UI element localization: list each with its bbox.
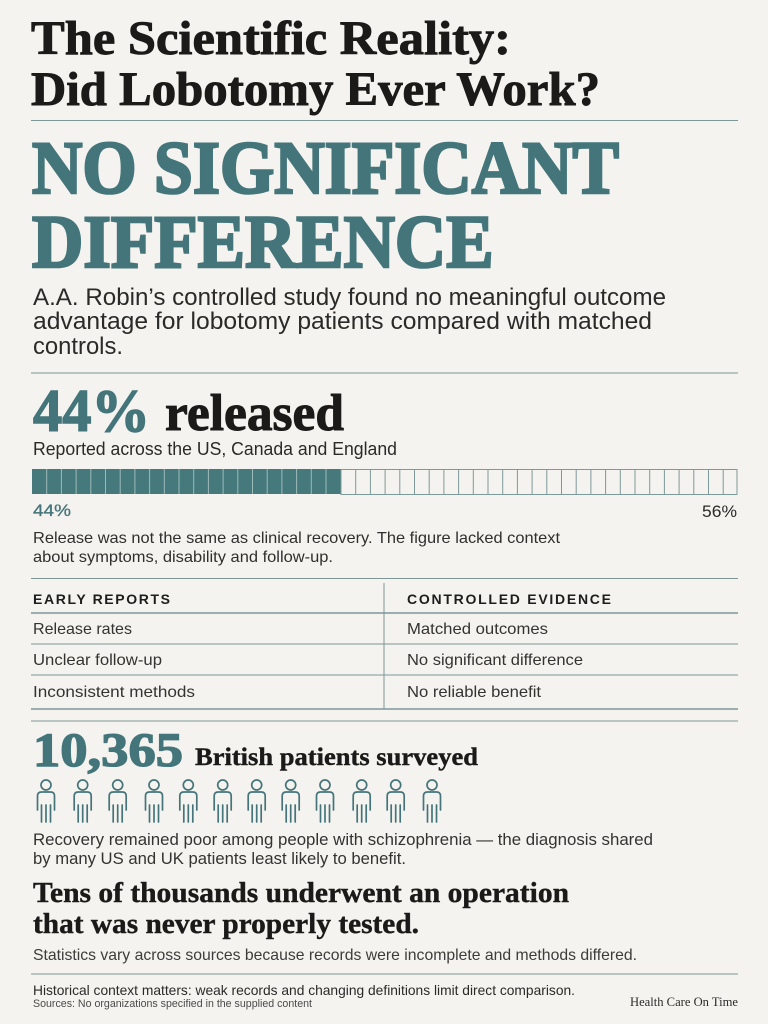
- headline: no significant difference: DIFFERENCE: [32, 200, 494, 283]
- footer: sources: Sources: No organizations specified in the supplied content: [33, 998, 312, 1010]
- schizophrenia note: Recovery remained poor among people with schizophrenia — the diagnosis shared: [33, 830, 653, 849]
- stat: 10,365 British patients surveyed: 10,365: [33, 724, 183, 777]
- release note: [33, 530, 561, 566]
- footer: historical context: Historical context matters: weak records and changing definitions limit direct comparison.: [33, 982, 575, 998]
- column: early reports: Inconsistent methods: [33, 684, 195, 701]
- title: [31, 12, 600, 116]
- comparison table: [31, 578, 738, 709]
- study summary text: controls.: [33, 333, 123, 360]
- stat: 44% released: [33, 377, 344, 444]
- headline: no significant difference: [32, 126, 619, 283]
- closing statement: that was never properly tested.: [33, 909, 419, 940]
- progress bar 44 / 56: [32, 469, 737, 494]
- stat: 10,365 British patients surveyed: British patients surveyed: [195, 744, 478, 771]
- title: The Scientific Reality:: [31, 12, 511, 65]
- study summary text: [33, 284, 666, 360]
- footer: brand: Health Care On Time: [630, 994, 738, 1009]
- closing statement: Tens of thousands underwent an operation: [33, 878, 569, 909]
- column: controlled evidence: Matched outcomes: [407, 621, 548, 638]
- column: controlled evidence: No significant difference: [407, 652, 583, 669]
- icon row: people: [38, 780, 440, 822]
- study summary text: A.A. Robin’s controlled study found no meaningful outcome: [33, 284, 666, 311]
- column: controlled evidence: [407, 591, 611, 701]
- column: early reports: Unclear follow-up: [33, 652, 162, 669]
- stat caption: Reported across the US, Canada and England: [33, 439, 397, 459]
- bar label 44%: 44%: [33, 501, 71, 520]
- schizophrenia note: [33, 830, 653, 868]
- stat: 10,365 British patients surveyed: [33, 724, 478, 777]
- column: early reports: [33, 591, 195, 701]
- column: controlled evidence: No reliable benefit: [407, 684, 542, 701]
- title: Did Lobotomy Ever Work?: [31, 63, 600, 116]
- release note: about symptoms, disability and follow-up.: [33, 549, 333, 566]
- headline: no significant difference: NO SIGNIFICANT: [32, 126, 619, 210]
- column: early reports: EARLY REPORTS: [33, 591, 170, 607]
- schizophrenia note: by many US and UK patients least likely to benefit.: [33, 849, 406, 868]
- column: controlled evidence: CONTROLLED EVIDENCE: [407, 591, 611, 607]
- study summary text: advantage for lobotomy patients compared with matched: [33, 308, 652, 335]
- closing statement: [33, 878, 569, 940]
- statistics note: Statistics vary across sources because records were incomplete and methods differed.: [33, 947, 637, 964]
- stat: 44% released: 44%: [33, 377, 150, 444]
- bar label 56%: 56%: [702, 502, 737, 521]
- release note: Release was not the same as clinical recovery. The figure lacked context: [33, 530, 561, 547]
- column: early reports: Release rates: [33, 621, 132, 638]
- stat: 44% released: released: [165, 385, 344, 442]
